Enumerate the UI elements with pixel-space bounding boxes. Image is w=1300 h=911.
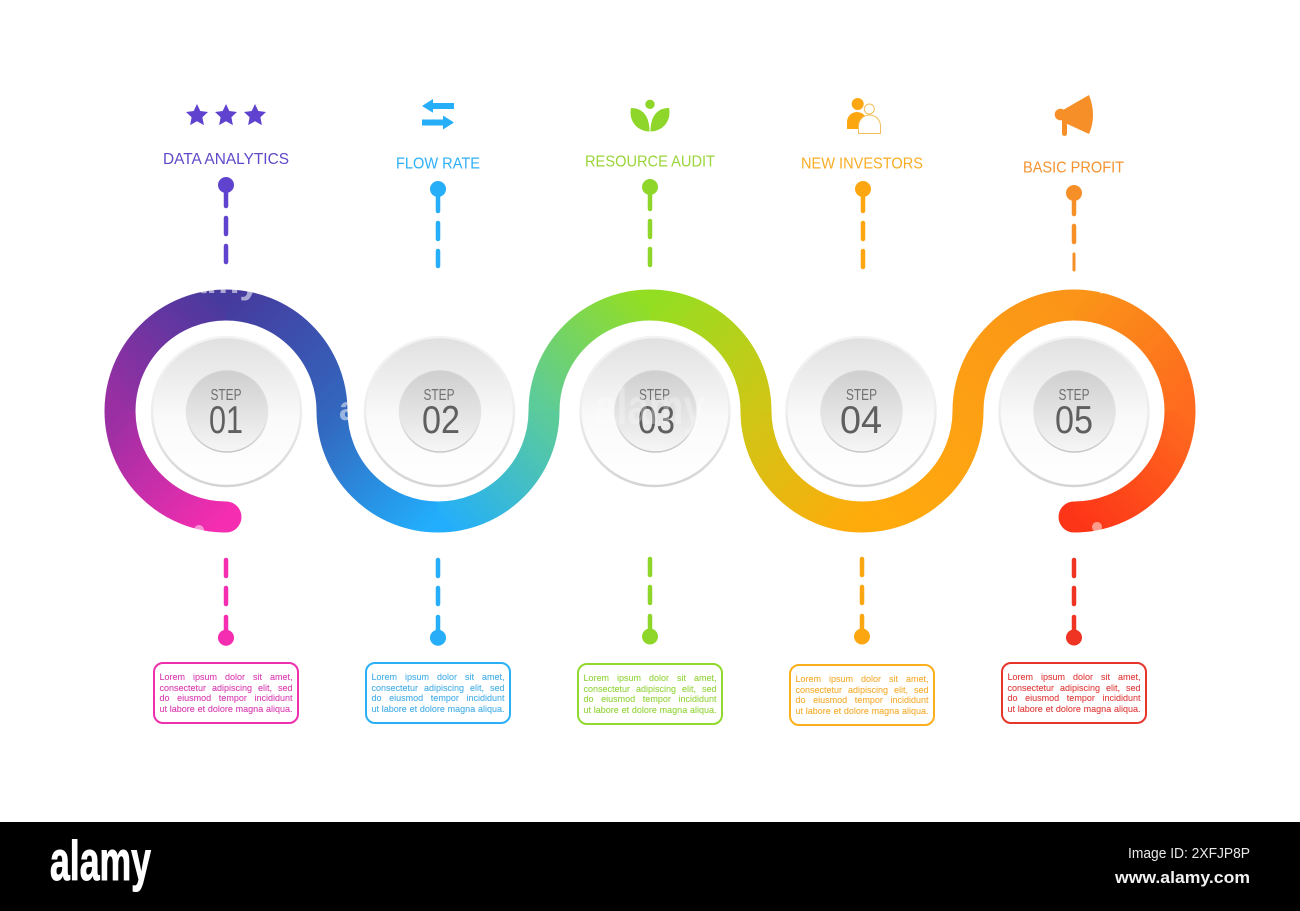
step 05 badge: 05 <box>1055 399 1093 442</box>
heading: data analytics: DATA ANALYTICS <box>163 151 289 168</box>
text box: step 1: Lorem ipsum dolor sit amet, <box>160 672 292 682</box>
icon: two investors <box>847 98 880 134</box>
step 01 badge: STEP <box>210 387 242 404</box>
footer bar: Image ID: 2XFJP8P <box>1128 845 1250 862</box>
text box: step 5: ut labore et dolore magna aliqua. <box>1008 704 1140 714</box>
step 04 badge <box>786 337 936 486</box>
step 05 badge <box>1000 337 1148 486</box>
step 01 badge: 01 <box>209 399 243 442</box>
text box: step 5: do eiusmod tempor incididunt <box>1008 693 1140 703</box>
pin: flow rate connector <box>430 181 446 266</box>
text box: step 1 <box>153 662 299 724</box>
text box: step 3: ut labore et dolore magna aliqua. <box>584 705 716 715</box>
pin: new investors connector <box>855 181 871 267</box>
text box: step 1: ut labore et dolore magna aliqua. <box>160 704 292 714</box>
pin: step 1 lower connector <box>218 560 234 646</box>
step 04 badge: 04 <box>840 399 882 442</box>
text box: step 5: Lorem ipsum dolor sit amet, <box>1008 672 1140 682</box>
text box: step 4: do eiusmod tempor incididunt <box>796 695 928 705</box>
heading: new investors: NEW INVESTORS <box>801 156 923 172</box>
winding rainbow ribbon <box>120 305 1180 532</box>
text box: step 1: do eiusmod tempor incididunt <box>160 693 292 703</box>
text box: step 4 <box>789 664 935 726</box>
heading: flow rate: FLOW RATE <box>396 156 480 172</box>
text box: step 3: consectetur adipiscing elit, sed <box>584 684 716 694</box>
footer bar <box>0 822 1300 911</box>
step 05 badge: STEP <box>1058 387 1090 404</box>
text box: step 5: consectetur adipiscing elit, sed <box>1008 683 1140 693</box>
icon: flow arrows <box>422 99 454 130</box>
pin: step 3 lower connector <box>642 559 658 644</box>
heading: basic profit: BASIC PROFIT <box>1023 160 1124 176</box>
step 03 badge <box>580 337 730 486</box>
watermark ghost text: alamy <box>595 379 705 435</box>
pin: resource audit connector <box>642 179 658 265</box>
text box: step 4: ut labore et dolore magna aliqua. <box>796 706 928 716</box>
text box: step 3 <box>577 663 723 725</box>
footer bar: alamy <box>50 829 151 892</box>
watermark ghost text: alamy <box>1030 264 1116 294</box>
text box: step 4: Lorem ipsum dolor sit amet, <box>796 674 928 684</box>
step 01 badge <box>152 337 301 486</box>
step 02 badge <box>365 337 514 486</box>
text box: step 2: ut labore et dolore magna aliqua. <box>372 704 504 714</box>
step 02 badge: STEP <box>424 387 454 404</box>
text box: step 5 <box>1001 662 1147 724</box>
watermark ghost text: a <box>339 390 359 428</box>
text box: step 2: Lorem ipsum dolor sit amet, <box>372 672 504 682</box>
step 04 badge: STEP <box>846 387 877 404</box>
icon: three stars <box>186 104 266 125</box>
icon: megaphone <box>1055 95 1093 136</box>
text box: step 2: do eiusmod tempor incididunt <box>372 693 504 703</box>
pin: step 2 lower connector <box>430 560 446 646</box>
text box: step 1: consectetur adipiscing elit, sed <box>160 683 292 693</box>
step 02 badge: 02 <box>422 399 460 442</box>
pin: step 4 lower connector <box>854 559 870 644</box>
text box: step 3: do eiusmod tempor incididunt <box>584 694 716 704</box>
pin: data analytics connector <box>218 177 234 262</box>
icon: sprout leaves <box>631 100 669 132</box>
text box: step 4: consectetur adipiscing elit, sed <box>796 685 928 695</box>
text box: step 2: consectetur adipiscing elit, sed <box>372 683 504 693</box>
step 03 badge: STEP <box>639 387 670 404</box>
text box: step 2 <box>365 662 511 724</box>
watermark ghost text <box>155 260 1116 535</box>
pin: basic profit connector <box>1066 185 1082 270</box>
pin: step 5 lower connector <box>1066 560 1082 646</box>
heading: resource audit: RESOURCE AUDIT <box>585 154 715 170</box>
watermark ghost text: alamy <box>155 260 260 301</box>
text box: step 3: Lorem ipsum dolor sit amet, <box>584 673 716 683</box>
step 03 badge: 03 <box>638 399 675 442</box>
footer bar: www.alamy.com <box>1114 868 1250 887</box>
